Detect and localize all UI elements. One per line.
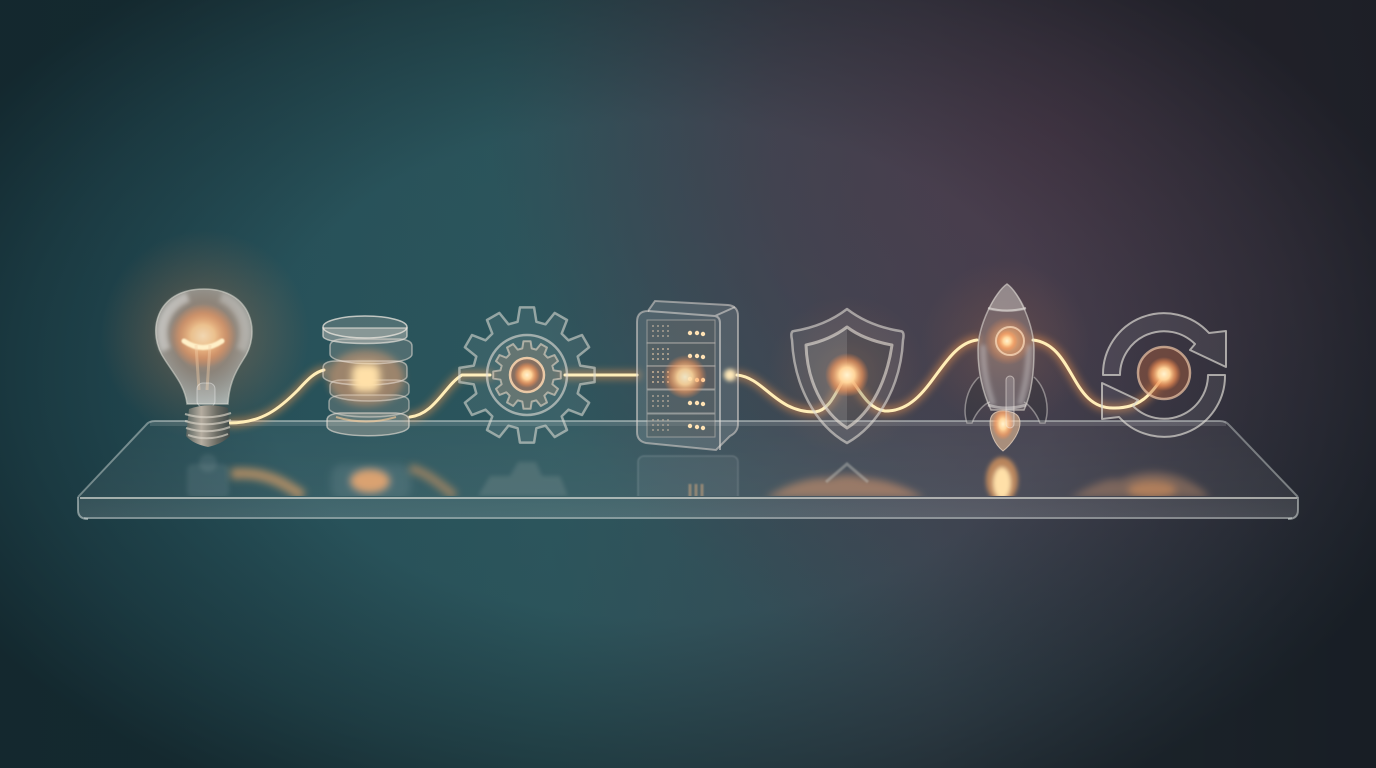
icon: rocket (965, 284, 1047, 451)
icon: server rack (637, 301, 738, 450)
server slot 5 (647, 414, 715, 437)
shield core glow (825, 353, 869, 397)
reflection: cycle (1070, 472, 1210, 499)
lower arrow (1102, 375, 1225, 437)
glass shelf (78, 420, 1298, 519)
coin 4 (330, 380, 409, 401)
shelf reflections (187, 454, 1210, 496)
icon: cycle arrows (1102, 313, 1226, 437)
icon: stack of glass coins (323, 316, 412, 436)
icon: shield (791, 309, 904, 443)
rocket porthole (984, 317, 1032, 365)
server slot 1 (647, 320, 715, 343)
icon: gear (459, 307, 595, 443)
icon: light bulb (156, 289, 252, 447)
reflection: wire 2 (410, 468, 455, 496)
server glow (663, 355, 707, 399)
reflection: wire and shield (765, 475, 925, 498)
cycle core (1138, 347, 1190, 399)
reflection: coins (331, 464, 411, 500)
bulb screw base (185, 405, 231, 447)
reflection: server (638, 456, 738, 502)
coin 1 (323, 316, 407, 344)
glow halo behind shield (767, 295, 927, 455)
coin 2 (330, 339, 412, 364)
server slot 2 (647, 343, 715, 366)
reflection: rocket flame (986, 457, 1018, 503)
server slot 3 (647, 366, 715, 389)
server slot 4 (647, 390, 715, 413)
coin 6 (327, 413, 409, 436)
glow halo behind bulb (100, 230, 310, 440)
coin 5 (329, 395, 409, 417)
reflection: shield outline (826, 464, 868, 482)
reflection: wire 1 (231, 473, 303, 496)
reflection: gear (478, 462, 568, 496)
reflection: bulb (187, 454, 229, 498)
upper arrow (1103, 313, 1226, 375)
glow halo behind rocket (920, 260, 1090, 430)
rocket flame (990, 408, 1020, 451)
coin stack glow (352, 364, 380, 392)
inner gear (493, 341, 561, 409)
coin 3 (323, 361, 407, 385)
glowing wire (230, 340, 1163, 423)
rocket fins (965, 377, 1047, 423)
